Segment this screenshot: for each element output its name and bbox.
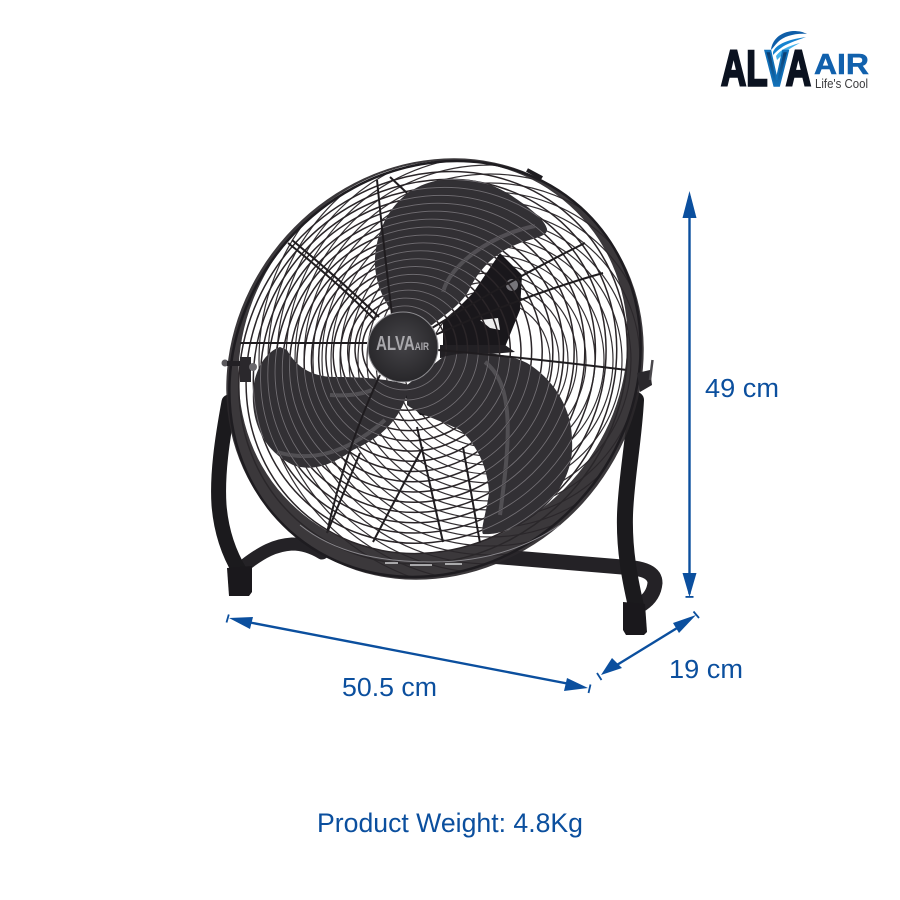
blade: right xyxy=(407,353,572,534)
infographic canvas xyxy=(211,31,869,838)
arrow: depth xyxy=(597,612,699,680)
motor and bracket xyxy=(395,253,522,420)
icon: logo air swirl xyxy=(771,31,807,60)
fan hub xyxy=(368,312,438,382)
cage rim band xyxy=(226,158,644,580)
cage background xyxy=(145,77,725,661)
blade: top xyxy=(375,179,547,325)
product weight: Product Weight: 4.8Kg xyxy=(317,808,583,838)
label: depth: 19 cm xyxy=(669,656,743,684)
left foot xyxy=(227,566,252,596)
arrow: height xyxy=(682,191,696,598)
product: floor fan xyxy=(211,158,662,635)
logo tagline: Life's Cool xyxy=(815,76,868,91)
radial wires xyxy=(240,177,627,543)
label: width: 50.5 cm xyxy=(342,674,437,702)
right foot xyxy=(623,602,647,635)
cage rim details xyxy=(144,77,726,661)
front grille rings xyxy=(158,92,708,644)
blade highlights xyxy=(277,226,535,515)
left leg xyxy=(219,402,240,572)
label: height: 49 cm xyxy=(705,375,779,403)
blade: left xyxy=(253,347,410,468)
right leg xyxy=(625,400,636,606)
base tube left xyxy=(245,544,322,565)
fan blades xyxy=(253,179,572,534)
logo wordmark ALVA: ALVA xyxy=(721,40,811,96)
logo: Alva Air xyxy=(721,31,869,96)
logo wordmark AIR: AIR xyxy=(814,49,869,81)
hub logo text: ALVAAIR xyxy=(376,333,429,355)
front grille rings over blades xyxy=(253,179,572,532)
rear base tube right xyxy=(490,556,655,604)
pivot bolts xyxy=(222,357,652,392)
fan stand xyxy=(219,400,655,606)
arrow: width xyxy=(226,614,590,693)
rear grille xyxy=(258,163,640,576)
